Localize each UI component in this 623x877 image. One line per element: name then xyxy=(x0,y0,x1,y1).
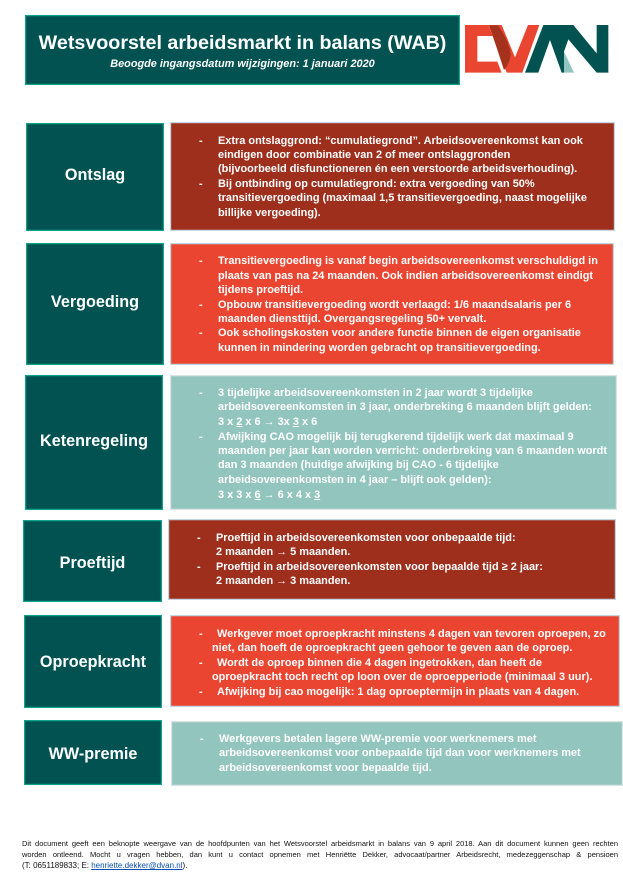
panel: Ketenregeling: Afwijking CAO mogelijk bij terugkerend tijdelijk werk dat maximaal 9 xyxy=(218,431,574,443)
panel: Ketenregeling: arbeidsovereenkomsten in 4 jaar – blijft ook gelden): xyxy=(218,474,492,486)
panel label: Ontslag xyxy=(26,123,164,231)
panel: Ontslag: Extra ontslaggrond: “cumulatiegrond”. Arbeidsovereenkomst kan ook xyxy=(218,135,583,147)
panel label: Proeftijd: Proeftijd xyxy=(60,554,125,572)
panel label: Ontslag: Ontslag xyxy=(65,166,125,184)
panel: Ketenregeling: 3 x 2 x 6 → 3x 3 x 6 xyxy=(218,416,317,428)
panel label: Oproepkracht: Oproepkracht xyxy=(40,653,146,671)
panel: Proeftijd: 2 maanden → 3 maanden. xyxy=(216,575,350,587)
panel label: Ketenregeling xyxy=(25,375,163,510)
footer disclaimer: worden ontleend. Mocht u vragen hebben, dan kunt u contact opnemen met Henriëtte Dekker, advocaat/partner Arbeidsrecht, medezeggenschap & pensioen xyxy=(22,850,618,859)
panel: Vergoeding: kunnen in mindering worden gebracht op transitievergoeding. xyxy=(218,342,541,354)
panel label: WW-premie xyxy=(24,720,162,785)
panel: Vergoeding: Transitievergoeding is vanaf begin arbeidsovereenkomst verschuldigd in xyxy=(218,255,598,267)
panel: Oproepkracht: - xyxy=(199,686,203,698)
footer disclaimer xyxy=(22,839,618,870)
panel: Proeftijd: 2 maanden → 5 maanden. xyxy=(216,546,350,558)
footer disclaimer: (T: 0651189833; E: henriette.dekker@dvan.nl). xyxy=(22,861,187,870)
panel: Ketenregeling: - xyxy=(199,431,203,443)
panel: Oproepkracht: - xyxy=(199,628,203,640)
panel: Proeftijd: - xyxy=(197,532,201,544)
icon: DVAN logo xyxy=(465,25,608,73)
panel: Ketenregeling: 3 x 3 x 6 → 6 x 4 x 3 xyxy=(218,489,320,501)
panel: WW-premie xyxy=(171,721,623,786)
panel: Ketenregeling: maanden per jaar kan worden verricht: onderbreking van 6 maanden wordt xyxy=(218,445,607,457)
panel: Ketenregeling: 3 tijdelijke arbeidsovereenkomsten in 2 jaar wordt 3 tijdelijke xyxy=(218,387,533,399)
panel: Vergoeding: Ook scholingskosten voor andere functie binnen de eigen organisatie xyxy=(218,327,581,339)
panel: Proeftijd xyxy=(168,519,616,600)
panel label: Proeftijd xyxy=(23,520,162,602)
panel: Oproepkracht xyxy=(170,615,620,707)
panel: Ontslag: eindigen door combinatie van 2 of meer ontslaggronden xyxy=(218,149,510,161)
panel: Vergoeding: maanden diensttijd. Overgangsregeling 50+ vervalt. xyxy=(218,313,486,325)
panel: Ontslag: Bij ontbinding op cumulatiegrond: extra vergoeding van 50% xyxy=(218,178,535,190)
panel: Vergoeding: - xyxy=(199,299,203,311)
panel: Ontslag: transitievergoeding (maximaal 1,5 transitievergoeding, naast mogelijke xyxy=(218,192,587,204)
panel: Oproepkracht: - xyxy=(199,657,203,669)
panel: Ontslag xyxy=(170,122,615,231)
panel label: Vergoeding: Vergoeding xyxy=(51,293,139,311)
subtitle: Beoogde ingangsdatum wijzigingen: 1 januari 2020 xyxy=(110,58,375,70)
panel: Proeftijd: Proeftijd in arbeidsovereenkomsten voor bepaalde tijd ≥ 2 jaar: xyxy=(216,561,543,573)
panel: Oproepkracht: niet, dan hoeft de oproepkracht geen gehoor te geven aan de oproep. xyxy=(212,642,572,654)
panel: Ketenregeling: arbeidsovereenkomsten in 3 jaar, onderbreking 6 maanden blijft gelden: xyxy=(218,401,592,413)
panel label: Vergoeding xyxy=(26,243,164,365)
panel label: Ketenregeling: Ketenregeling xyxy=(40,432,148,450)
panel: Ketenregeling: - xyxy=(199,387,203,399)
panel: Ontslag: (bijvoorbeeld disfunctioneren én een verstoorde arbeidsverhouding). xyxy=(218,163,577,175)
footer disclaimer: Dit document geeft een beknopte weergave van de hoofdpunten van het Wetsvoorstel arbeidsmarkt in balans van 9 april 2018. Aan dit document kunnen geen rechten xyxy=(22,839,618,848)
panel: Oproepkracht: Wordt de oproep binnen die 4 dagen ingetrokken, dan heeft de xyxy=(217,657,542,669)
panel: Vergoeding: tijdens proeftijd. xyxy=(218,284,303,296)
panel: Proeftijd: Proeftijd in arbeidsovereenkomsten voor onbepaalde tijd: xyxy=(216,532,516,544)
panel label: Oproepkracht xyxy=(24,615,162,708)
panel: Vergoeding xyxy=(170,243,614,365)
panel: Ontslag: billijke vergoeding). xyxy=(218,207,321,219)
panel: WW-premie: - xyxy=(200,733,204,745)
panel: Proeftijd: - xyxy=(197,561,201,573)
panel: Vergoeding: Opbouw transitievergoeding wordt verlaagd: 1/6 maandsalaris per 6 xyxy=(218,299,571,311)
panel: WW-premie: arbeidsovereenkomst voor onbepaalde tijd dan voor werknemers met xyxy=(219,747,581,759)
panel: Oproepkracht: oproepkracht toch recht op loon over de oproepperiode (minimaal 3 uur). xyxy=(212,671,592,683)
header banner xyxy=(25,15,460,85)
title: Wetsvoorstel arbeidsmarkt in balans (WAB) xyxy=(39,32,446,54)
panel: Ontslag: - xyxy=(199,178,203,190)
panel: WW-premie: arbeidsovereenkomst voor bepaalde tijd. xyxy=(219,762,432,774)
panel: Vergoeding: - xyxy=(199,327,203,339)
panel: Vergoeding: plaats van pas na 24 maanden. Ook indien arbeidsovereenkomst eindigt xyxy=(218,270,593,282)
panel: Ketenregeling xyxy=(170,375,617,510)
panel label: WW-premie: WW-premie xyxy=(49,744,137,762)
panel: Oproepkracht: Werkgever moet oproepkracht minstens 4 dagen van tevoren oproepen, zo xyxy=(217,628,606,640)
panel: Vergoeding: - xyxy=(199,255,203,267)
panel: Ketenregeling: dan 3 maanden (huidige afwijking bij CAO - 6 tijdelijke xyxy=(218,459,499,471)
panel: Oproepkracht: Afwijking bij cao mogelijk: 1 dag oproeptermijn in plaats van 4 dagen. xyxy=(217,686,579,698)
panel: WW-premie: Werkgevers betalen lagere WW-premie voor werknemers met xyxy=(219,733,536,745)
panel: Ontslag: - xyxy=(199,135,203,147)
